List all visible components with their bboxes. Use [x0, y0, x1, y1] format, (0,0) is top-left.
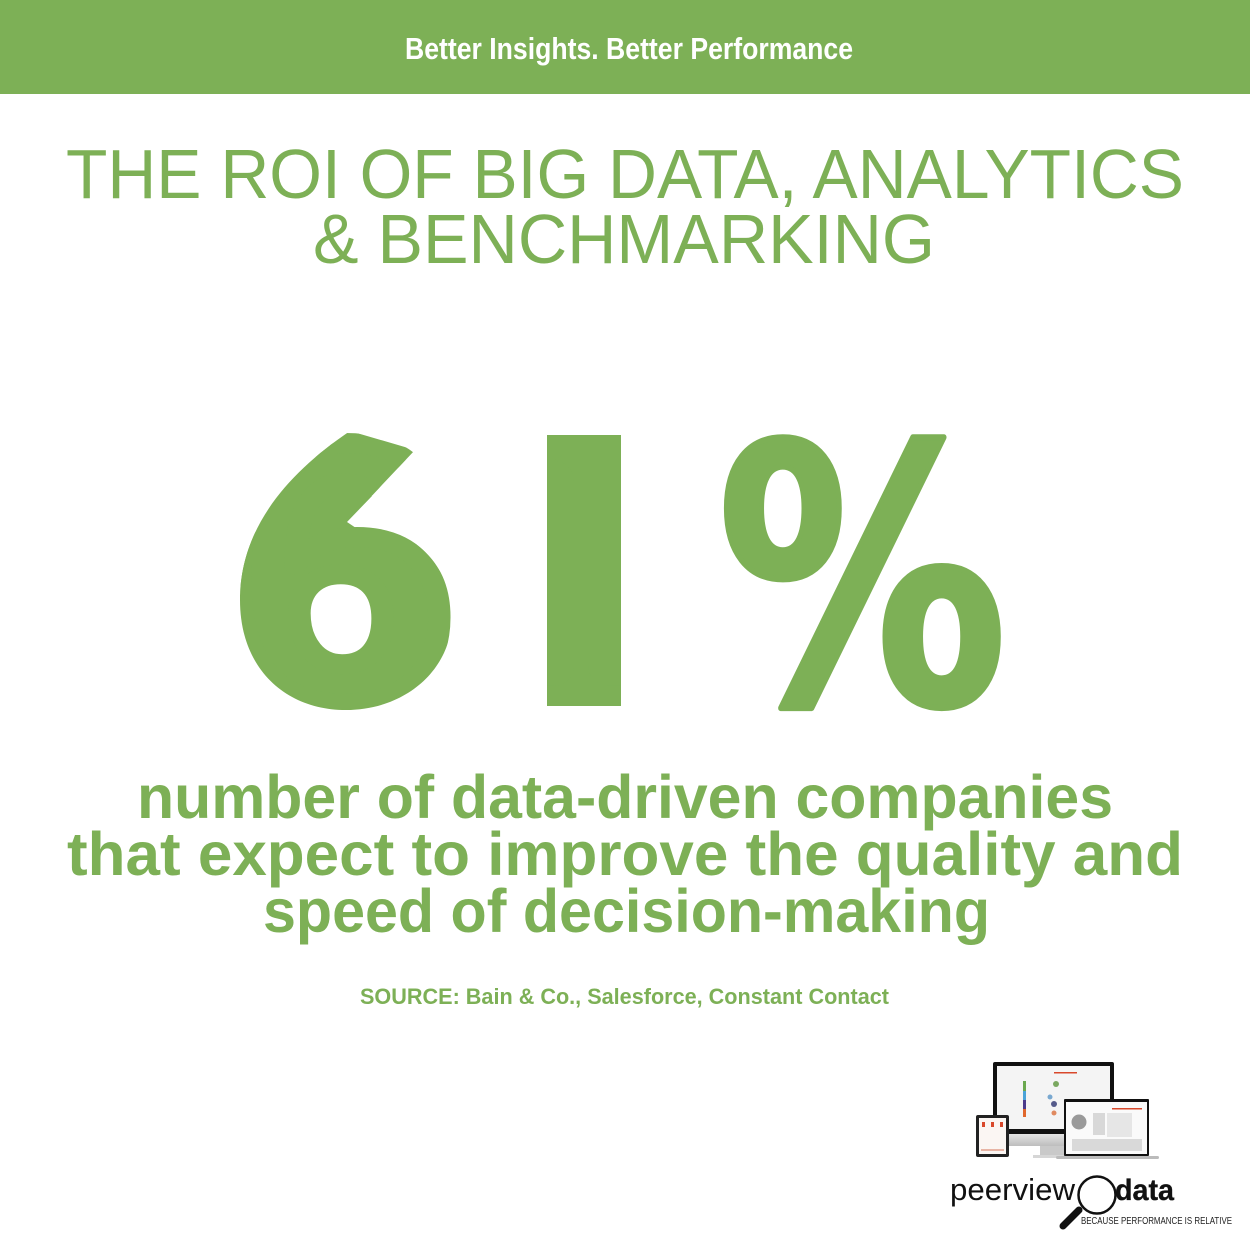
description text: that expect to improve the quality and	[67, 820, 1183, 888]
title: THE ROI OF BIG DATA, ANALYTICS	[66, 135, 1184, 213]
big statistic 61%	[240, 433, 1001, 712]
icon: magnifying glass	[1063, 1176, 1116, 1226]
logo wordmark bold: data	[1115, 1174, 1174, 1207]
big statistic 61%: %	[717, 371, 1008, 788]
description text	[67, 763, 1183, 945]
big statistic 61%: 1	[462, 350, 681, 790]
big statistic 61%: 6	[225, 367, 454, 778]
title	[66, 135, 1184, 278]
icon: tablet	[976, 1115, 1009, 1157]
icon: desktop monitor	[993, 1062, 1114, 1158]
title: & BENCHMARKING	[313, 200, 935, 278]
icon: laptop	[1056, 1099, 1159, 1159]
source note: SOURCE: Bain & Co., Salesforce, Constant Contact	[360, 984, 890, 1009]
description text: number of data-driven companies	[137, 763, 1113, 831]
logo wordmark: peerview	[950, 1172, 1076, 1207]
header band	[0, 0, 1250, 94]
device mockups	[976, 1062, 1159, 1159]
description text: speed of decision-making	[263, 877, 990, 945]
logo	[950, 1172, 1232, 1227]
header tagline: Better Insights. Better Performance	[405, 31, 853, 66]
